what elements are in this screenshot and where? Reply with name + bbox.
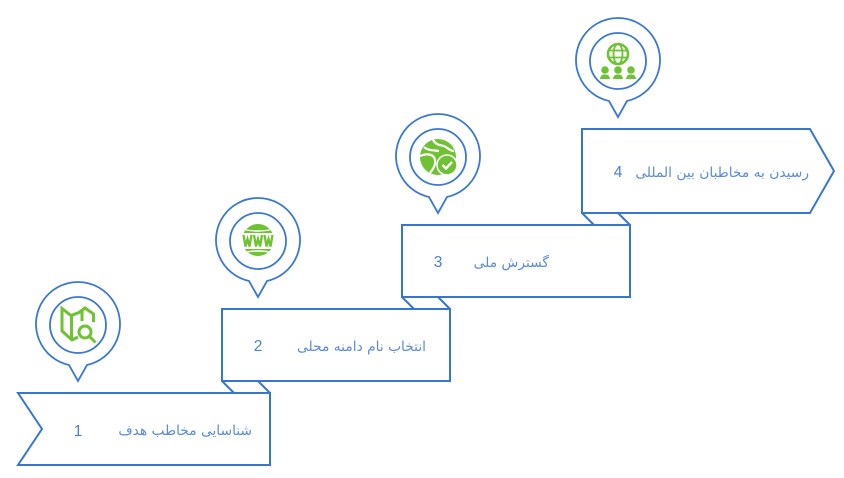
banner: step 1: [18, 393, 270, 465]
step 2: local domain: [216, 198, 450, 393]
pin: step 1: [36, 282, 120, 381]
step 1: identify target audience: [18, 282, 270, 465]
banner: step 2: [222, 309, 450, 381]
step 4: international audience: [576, 18, 834, 225]
pin: step 3: [396, 114, 480, 213]
step 3: national expansion: [396, 114, 630, 309]
ribbon fold: step 4: [582, 213, 630, 225]
banner: step 3: [402, 225, 630, 297]
icon: globe with people: [600, 44, 636, 79]
ribbon fold: step 2: [222, 381, 270, 393]
ribbon fold: step 3: [402, 297, 450, 309]
step 1 number: 1: [74, 423, 82, 440]
icon: globe with check badge: [420, 139, 457, 175]
step 1 label: شناسایی مخاطب هدف: [118, 423, 252, 439]
step 2 number: 2: [254, 338, 262, 355]
icon: map with magnifier: [62, 308, 96, 342]
step 4 label: رسیدن به مخاطبان بین المللی: [635, 165, 809, 181]
pin: step 4: [576, 18, 660, 117]
banner: step 4: [582, 129, 834, 213]
step 2 label: انتخاب نام دامنه محلی: [297, 339, 426, 355]
step 3 label: گسترش ملی: [474, 254, 549, 271]
step 4 number: 4: [614, 164, 623, 181]
icon: www globe: [241, 224, 275, 256]
pin: step 2: [216, 198, 300, 297]
step 3 number: 3: [434, 254, 442, 271]
